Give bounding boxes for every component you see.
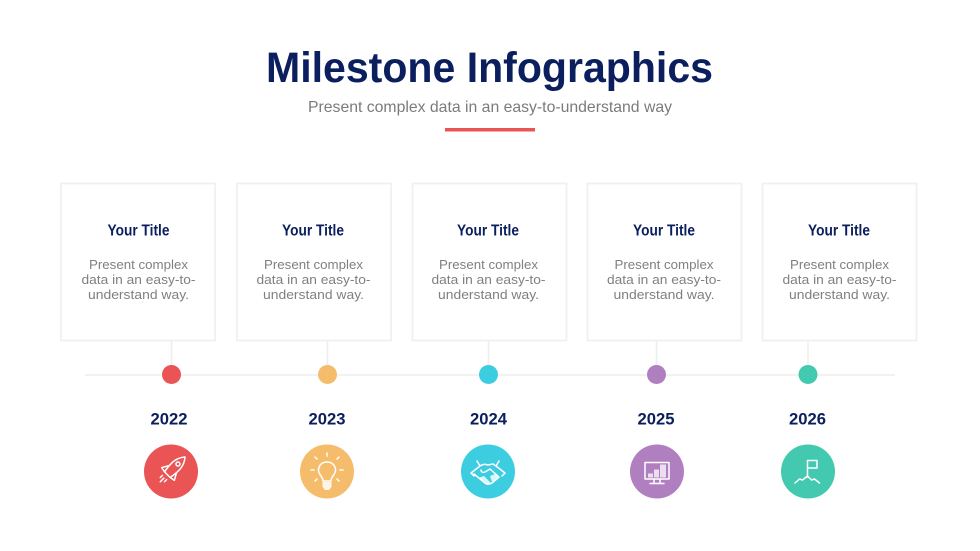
card text 2022 (82, 257, 196, 302)
marker 2022 (162, 341, 181, 384)
card text 2022: data in an easy-to- (82, 272, 196, 287)
card text 2022: understand way. (88, 287, 189, 302)
card text 2024 (432, 257, 546, 302)
card text 2023: data in an easy-to- (256, 272, 370, 287)
card text 2023: Present complex (264, 257, 364, 272)
card text 2026: understand way. (789, 287, 890, 302)
year 2022: 2022 (150, 410, 188, 428)
card text 2025 (607, 257, 721, 302)
card text 2024: understand way. (438, 287, 539, 302)
card text 2026: Present complex (790, 257, 890, 272)
card text 2026 (782, 257, 896, 302)
card text 2024: data in an easy-to- (432, 272, 546, 287)
card text 2026: data in an easy-to- (782, 272, 896, 287)
subtitle: Present complex data in an easy-to-understand way (308, 99, 672, 116)
card text 2022: Present complex (89, 257, 189, 272)
timeline line (85, 374, 895, 376)
panel: 2022 card (61, 184, 215, 340)
icon: handshake (461, 444, 515, 498)
card text 2023 (256, 257, 370, 302)
card text 2025: Present complex (614, 257, 714, 272)
card text 2025: data in an easy-to- (607, 272, 721, 287)
panel: 2024 card (412, 184, 566, 340)
icon: monitor chart (630, 444, 684, 498)
panel: 2023 card (237, 184, 391, 340)
title underline (445, 128, 535, 132)
marker 2024 (479, 341, 498, 384)
card text 2024: Present complex (439, 257, 539, 272)
icon: flag on mountain (781, 444, 835, 498)
panel: 2025 card (588, 184, 742, 340)
card title 2024: Your Title (457, 222, 519, 240)
icon: lightbulb (300, 444, 354, 498)
year 2025: 2025 (638, 410, 674, 428)
card title 2025: Your Title (633, 222, 695, 240)
icon: rocket (144, 444, 198, 498)
card text 2025: understand way. (614, 287, 714, 302)
year 2026: 2026 (789, 410, 826, 428)
card title 2022: Your Title (108, 222, 170, 240)
title: Milestone Infographics (266, 44, 713, 92)
marker 2025 (647, 341, 666, 384)
card title 2023: Your Title (282, 222, 344, 240)
panel: 2026 card (762, 184, 916, 340)
year 2023: 2023 (308, 410, 346, 428)
marker 2023 (318, 341, 337, 384)
card title 2026: Your Title (808, 222, 870, 240)
card text 2023: understand way. (263, 287, 364, 302)
marker 2026 (798, 341, 818, 384)
year 2024: 2024 (470, 410, 508, 428)
